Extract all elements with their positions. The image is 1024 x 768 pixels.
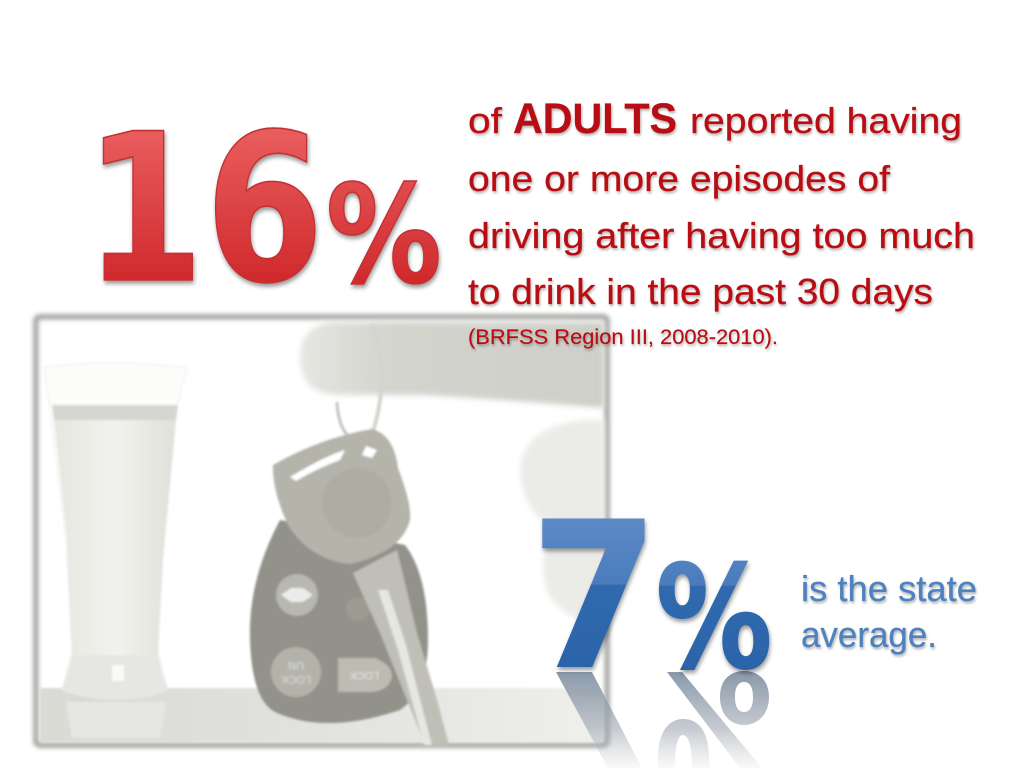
lock button: [338, 658, 392, 692]
state average text: average.: [801, 614, 937, 655]
fob body: [250, 520, 428, 723]
head circle: [322, 468, 392, 538]
stat: 7%: [531, 481, 772, 714]
line 1: [468, 95, 962, 143]
fob head: [273, 429, 410, 564]
source citation: (BRFSS Region III, 2008-2010).: [468, 326, 778, 349]
stat: 7%: %: [656, 536, 772, 701]
key blade: [353, 550, 449, 745]
stat: 16%: 1: [84, 90, 204, 329]
state average text: is the state: [801, 568, 977, 609]
unlock button: [271, 647, 321, 697]
photo: glass and car keys: [36, 317, 607, 745]
table surface: [40, 688, 603, 742]
car button: [276, 574, 318, 616]
line 1: ADULTS: [513, 95, 677, 143]
small button: [346, 597, 370, 621]
line 2: one or more episodes of: [468, 158, 891, 199]
icon: remote key fob: UN: [288, 659, 304, 671]
icon: remote key fob: [250, 429, 449, 745]
icon: beer glass: [44, 363, 187, 738]
line 4: to drink in the past 30 days: [468, 271, 933, 312]
stat: 16%: [84, 90, 442, 329]
stat: 7%: 7: [531, 481, 658, 714]
icon: remote key fob: LOCK: [280, 673, 311, 685]
key slot: [290, 446, 377, 481]
stat: 16%: %: [326, 156, 442, 314]
description text: [468, 95, 975, 349]
state average text: [801, 568, 977, 655]
line 1: of: [468, 100, 503, 141]
reflection of 7%: [556, 671, 769, 768]
line 1: reported having: [690, 100, 962, 141]
icon: fingers holding keys: [300, 322, 604, 628]
line 3: driving after having too much: [468, 215, 975, 256]
stat: 16%: 6: [205, 90, 324, 329]
photo frame: [36, 317, 607, 745]
icon: remote key fob: LOCK: [348, 669, 379, 681]
icon: key ring: [337, 324, 382, 440]
